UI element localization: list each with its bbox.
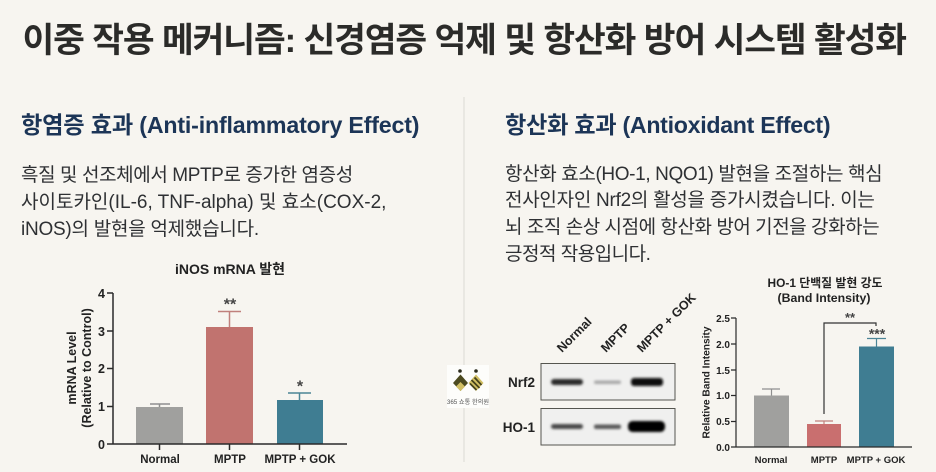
significance marks: iNOS: [224, 296, 304, 396]
left body text: 흑질 및 선조체에서 MPTP로 증가한 염증성: [21, 165, 353, 186]
significance marks: iNOS: *: [297, 378, 304, 396]
significance bracket: ***: [869, 326, 886, 342]
significance bracket: **: [845, 310, 856, 325]
blot column labels: Normal: [554, 315, 595, 355]
blot row labels: [503, 375, 535, 435]
blot row labels: HO-1: [503, 420, 535, 435]
blot row labels: Nrf2: [508, 375, 535, 390]
x labels: iNOS: Normal: [140, 454, 180, 466]
x labels: HO-1: MPTP + GOK: [847, 455, 905, 466]
y tick labels: iNOS: 1: [98, 400, 105, 414]
y axis title: mRNA level: mRNA Level: [65, 331, 79, 405]
axes: iNOS: [107, 293, 347, 450]
x labels: HO-1: Normal: [755, 455, 787, 466]
y tick labels: iNOS: 3: [98, 325, 105, 339]
title: 이중 작용 메커니즘: 신경염증 억제 및 항산화 방어 시스템 활성화: [22, 22, 906, 60]
left body text: [21, 165, 386, 240]
right body text: 전사인자인 Nrf2의 활성을 증가시켰습니다. 이는: [505, 190, 875, 211]
significance bracket: [824, 310, 886, 414]
blot column labels: MPTP + GOK: [634, 291, 699, 355]
left body text: 사이토카인(IL-6, TNF-alpha) 및 효소(COX-2,: [21, 192, 386, 213]
x labels: iNOS: [140, 454, 336, 466]
bars: HO-1: [754, 338, 894, 447]
bars: iNOS: [136, 312, 323, 444]
bar chart: HO-1: (Band Intensity): [778, 291, 870, 305]
y tick labels: HO-1: [716, 314, 730, 454]
right body text: 항산화 효소(HO-1, NQO1) 발현을 조절하는 핵심: [505, 164, 882, 184]
y tick labels: HO-1: 1.0: [716, 391, 730, 402]
x labels: iNOS: MPTP + GOK: [264, 454, 336, 466]
left body text: iNOS)의 발현을 억제했습니다.: [21, 219, 259, 240]
y tick labels: HO-1: 0.5: [716, 417, 730, 428]
x labels: HO-1: MPTP: [811, 455, 838, 466]
y tick labels: HO-1: 2.5: [716, 314, 730, 325]
chart title: iNOS: iNOS mRNA 발현: [175, 261, 285, 277]
right body text: 뇌 조직 손상 시점에 항산화 방어 기전을 강화하는: [505, 217, 879, 238]
logo text: 365 쇼통 한의원: [447, 398, 489, 406]
blot: HO-1: [541, 408, 675, 445]
blot column labels: MPTP: [598, 321, 633, 355]
right body text: [505, 164, 882, 265]
y tick labels: iNOS: 0: [98, 438, 105, 452]
y axis title: band intensity: Relative Band Intensity: [702, 326, 712, 439]
left heading: 항염증 효과 (Anti-inflammatory Effect): [21, 112, 419, 138]
x labels: iNOS: MPTP: [214, 454, 246, 466]
right heading: 항산화 효과 (Antioxidant Effect): [505, 112, 830, 138]
significance marks: iNOS: **: [224, 296, 237, 314]
y tick labels: iNOS: [98, 287, 105, 452]
center divider: [463, 97, 465, 462]
bar chart: iNOS mRNA: (Relative to Control): [80, 308, 94, 428]
blot: Nrf2: [541, 364, 675, 400]
y tick labels: iNOS: 4: [98, 287, 105, 301]
y tick labels: iNOS: 2: [98, 362, 105, 376]
x labels: HO-1: [755, 455, 905, 466]
chart title: HO-1: HO-1 단백질 발현 강도: [768, 276, 883, 290]
blot column labels: [554, 291, 699, 355]
bar chart: iNOS mRNA: [65, 261, 347, 466]
icon: diamonds: [453, 369, 484, 391]
axes: HO-1: [731, 318, 912, 447]
western blot: [503, 291, 699, 445]
right body text: 긍정적 작용입니다.: [505, 244, 650, 265]
y tick labels: HO-1: 2.0: [716, 340, 730, 351]
y tick labels: HO-1: 1.5: [716, 366, 730, 377]
bar chart: HO-1: [702, 276, 912, 466]
logo: 365: [447, 365, 489, 408]
y tick labels: HO-1: 0.0: [716, 443, 730, 454]
